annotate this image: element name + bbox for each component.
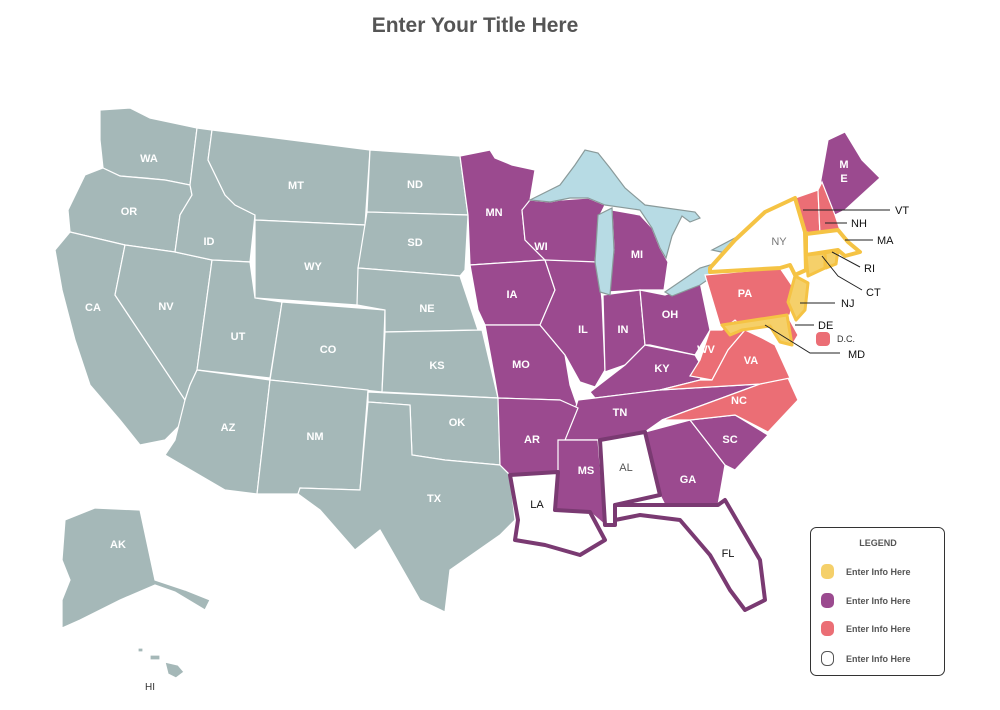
- legend: LEGEND: [859, 538, 897, 548]
- state labels: IL: [578, 324, 588, 336]
- state labels: OH: [662, 309, 678, 321]
- callouts: [765, 210, 890, 353]
- map: VT: [895, 205, 909, 217]
- state labels: NV: [158, 301, 174, 313]
- state labels: WI: [534, 241, 548, 253]
- map: MA: [877, 235, 894, 247]
- state labels: MN: [485, 207, 503, 219]
- state labels: IN: [618, 324, 629, 336]
- map: CT: [866, 287, 881, 299]
- state labels: CO: [320, 344, 337, 356]
- state labels: AZ: [221, 422, 236, 434]
- legend: Enter Info Here: [846, 567, 911, 577]
- state labels: ND: [407, 179, 423, 191]
- map: [55, 108, 909, 693]
- map: D.C.: [837, 334, 855, 344]
- legend: Enter Info Here: [846, 654, 911, 664]
- state labels: OK: [449, 417, 465, 429]
- state labels: NY: [771, 236, 787, 248]
- state labels: NC: [731, 395, 747, 407]
- state labels: IA: [506, 289, 518, 301]
- lakes: [530, 150, 764, 296]
- state labels: TX: [427, 493, 442, 505]
- state labels: AK: [110, 539, 126, 551]
- state labels: HI: [145, 682, 155, 693]
- title: Enter Your Title Here: [372, 14, 578, 37]
- state labels: MO: [512, 359, 530, 371]
- state labels: KY: [654, 363, 670, 375]
- gray states: [55, 108, 515, 678]
- state labels: WA: [140, 153, 158, 165]
- white outlined states: [510, 432, 765, 610]
- state labels: TN: [613, 407, 627, 419]
- state labels: KS: [429, 360, 445, 372]
- state labels: PA: [738, 288, 752, 300]
- state labels: GA: [680, 474, 696, 486]
- legend: Enter Info Here: [846, 624, 911, 634]
- state labels: ID: [204, 236, 215, 248]
- state labels: SD: [407, 237, 423, 249]
- map: MD: [848, 349, 865, 361]
- state labels: NE: [419, 303, 435, 315]
- map: RI: [864, 263, 875, 275]
- state labels: LA: [530, 499, 544, 511]
- state labels: OR: [121, 206, 137, 218]
- state labels: M: [839, 159, 849, 171]
- state labels: MI: [631, 249, 643, 261]
- legend: Enter Info Here: [846, 596, 911, 606]
- state labels: FL: [722, 548, 734, 560]
- purple states: [460, 132, 880, 525]
- state labels: AL: [619, 462, 633, 474]
- state labels: UT: [231, 331, 246, 343]
- state labels: MS: [578, 465, 594, 477]
- pink states: [660, 182, 840, 432]
- map: NJ: [841, 298, 854, 310]
- legend: [810, 528, 944, 676]
- state labels: VA: [744, 355, 758, 367]
- state labels: [85, 153, 849, 693]
- state labels: E: [840, 173, 848, 185]
- map: DE: [818, 320, 833, 332]
- yellow outlined states: [710, 198, 860, 345]
- state labels: SC: [722, 434, 738, 446]
- state labels: AR: [524, 434, 540, 446]
- state labels: NM: [306, 431, 324, 443]
- state labels: CA: [85, 302, 101, 314]
- state labels: MT: [288, 180, 304, 192]
- state labels: WV: [697, 344, 716, 356]
- map: NH: [851, 218, 867, 230]
- state labels: WY: [304, 261, 323, 273]
